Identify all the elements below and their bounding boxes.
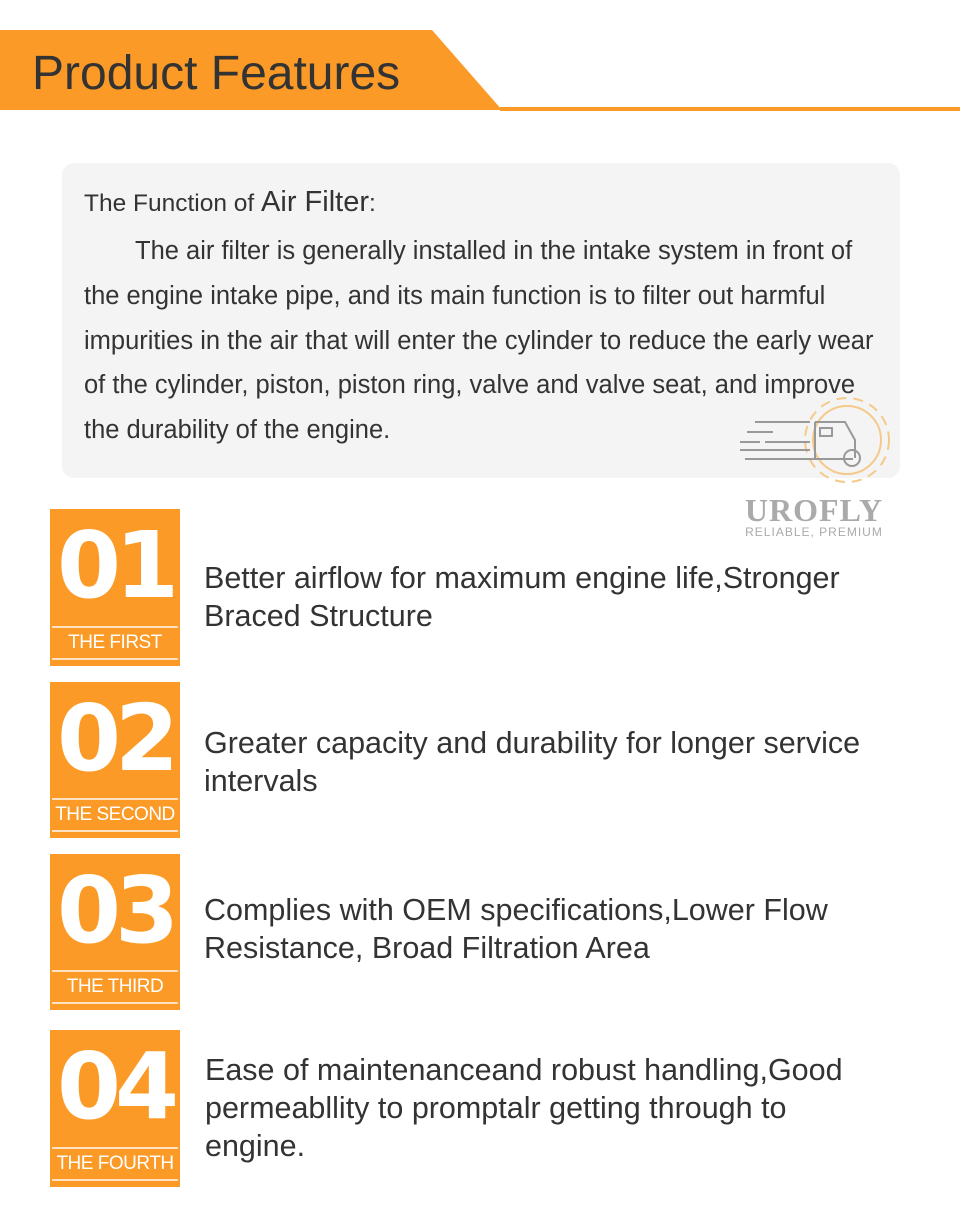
feature 2: intervals: [204, 764, 318, 798]
icon: truck gear logo: [740, 397, 890, 539]
feature 4: Ease of maintenanceand robust handling,Good: [205, 1053, 843, 1087]
feature 4: permeabllity to promptalr getting through to: [205, 1091, 787, 1125]
badge 03: [50, 854, 180, 1010]
badge 01: [50, 509, 180, 666]
badge 03: 03: [57, 857, 173, 964]
icon: truck gear logo: RELIABLE, PREMIUM: [745, 525, 883, 539]
badge 04: THE FOURTH: [56, 1153, 174, 1174]
feature 3: [204, 893, 828, 965]
feature 1: Braced Structure: [204, 599, 433, 633]
text block: [84, 237, 874, 444]
badge 01: THE FIRST: [68, 632, 162, 653]
badge 02: 02: [57, 685, 173, 792]
feature 3: Complies with OEM specifications,Lower Flow: [204, 893, 828, 927]
feature 1: Better airflow for maximum engine life,Stronger: [204, 561, 840, 595]
panel: air filter function: [62, 163, 900, 478]
text block: the engine intake pipe, and its main function is to filter out harmful: [84, 282, 825, 310]
feature 4: engine.: [205, 1129, 305, 1163]
badge 02: [50, 682, 180, 838]
feature 3: Resistance, Broad Filtration Area: [204, 931, 650, 965]
badge 01: 01: [57, 512, 173, 619]
text block: of the cylinder, piston, piston ring, valve and valve seat, and improve: [84, 371, 855, 399]
title: Product Features: [32, 47, 400, 100]
feature 4: [205, 1053, 843, 1163]
heading: The Function of Air Filter:: [84, 186, 376, 218]
badge 02: THE SECOND: [55, 804, 175, 825]
feature 2: [204, 726, 860, 798]
logo text: UROFLY: [745, 492, 883, 528]
header banner: [0, 30, 960, 111]
badge 03: THE THIRD: [67, 976, 163, 997]
text block: the durability of the engine.: [84, 416, 390, 444]
badge 04: [50, 1030, 180, 1187]
text block: impurities in the air that will enter the cylinder to reduce the early wear: [84, 327, 873, 355]
feature 1: [204, 561, 840, 633]
feature 2: Greater capacity and durability for longer service: [204, 726, 860, 760]
badge 04: 04: [57, 1033, 173, 1140]
text block: The air filter is generally installed in the intake system in front of: [135, 237, 852, 265]
